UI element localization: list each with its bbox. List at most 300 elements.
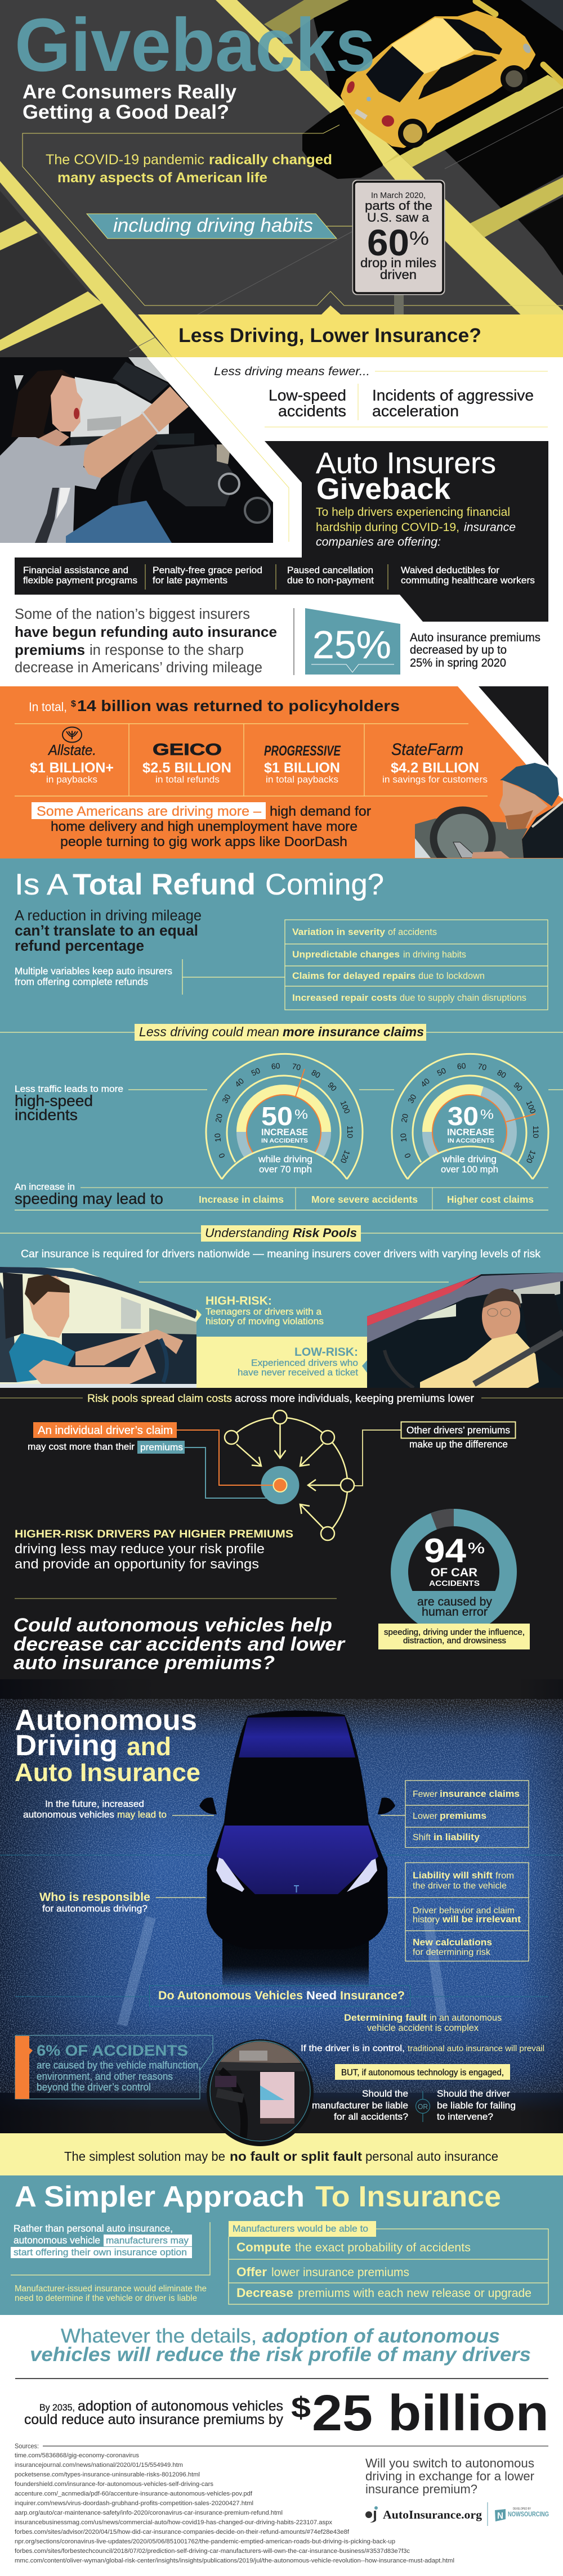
text: manufacturer or driver liable: manufacturer be liable bbox=[312, 2100, 408, 2111]
sources list: Sources: bbox=[15, 2443, 39, 2450]
offerings list: Paused cancellation bbox=[287, 565, 373, 576]
stat: 25 billion: adoption of autonomous vehicles bbox=[78, 2398, 283, 2414]
text: manufacturers may offer insurance: start offering their own insurance option bbox=[14, 2247, 187, 2258]
chart: 94 percent donut: ACCIDENTS bbox=[429, 1579, 480, 1588]
road sign: 60% drop: parts of the bbox=[365, 199, 432, 213]
list: liability changes: will be irrelevant bbox=[442, 1914, 521, 1925]
heading: autonomous driving and auto insurance: Auto Insurance bbox=[15, 1758, 200, 1787]
list: manufacturers would be able to: Decrease bbox=[236, 2286, 293, 2300]
callout: 6 percent of accidents: are caused by the vehicle malfunction, bbox=[37, 2060, 201, 2071]
text: high-risk drivers: Teenagers or drivers with a bbox=[205, 1307, 322, 1317]
gauge: 30 percent over 100 mph: 30 bbox=[448, 1102, 479, 1131]
road sign: 60% drop bbox=[352, 180, 445, 315]
heading: whatever the details: Whatever the details, bbox=[61, 2325, 257, 2347]
gauge: 30 percent over 100 mph: IN ACCIDENTS bbox=[448, 1138, 494, 1144]
text: risk pools spread claim costs bbox=[0, 1392, 563, 1405]
text: determining fault: vehicle accident is complex bbox=[367, 2023, 479, 2033]
panel: blue autonomous driving section bbox=[0, 1679, 563, 2135]
gauge: 30 percent over 100 mph: while driving bbox=[442, 1154, 497, 1165]
stat: 25 billion: By 2035, bbox=[39, 2402, 75, 2413]
offerings list: Waived deductibles for bbox=[401, 565, 499, 576]
banner: simplest solution: no fault or split fault bbox=[230, 2149, 362, 2164]
sources list: npr.org/sections/coronavirus-live-updates/2020/05/06/851001762/the-pandemic-emptied-american-roads-but-driving-is-picking-back-up bbox=[15, 2538, 395, 2545]
heading: could autonomous vehicles help: decrease car accidents and lower bbox=[14, 1634, 346, 1655]
heading: more insurance claims: more insurance claims bbox=[283, 1024, 424, 1039]
photo: delivery driver bbox=[415, 763, 563, 866]
heading: 14 billion: $ bbox=[71, 699, 76, 709]
text: risk pools spread claim costs: across more individuals, keeping premiums lower bbox=[235, 1392, 474, 1405]
list: autonomous outcomes: insurance claims bbox=[440, 1788, 520, 1799]
list: liability changes: Driver behavior and claim bbox=[413, 1906, 515, 1916]
offerings list: for late payments bbox=[153, 575, 227, 586]
text: who is responsible: Who is responsible bbox=[39, 1891, 150, 1904]
stat: 25 billion: 25 billion bbox=[312, 2385, 549, 2442]
insurer: GEICO bbox=[142, 741, 231, 785]
question: will you switch bbox=[365, 2456, 534, 2496]
gauge: 30 percent over 100 mph: 0 bbox=[403, 1152, 413, 1159]
callout: 25 percent: 25% in spring 2020 bbox=[410, 657, 506, 669]
panel: low-risk drivers: have never received a ticket bbox=[238, 1368, 358, 1378]
gauge: 50 percent over 70 mph: over 70 mph bbox=[259, 1164, 312, 1175]
text: less driving means fewer: Incidents of aggressive bbox=[372, 386, 534, 404]
heading: do autonomous vehicles need insurance: Do Autonomous Vehicles bbox=[158, 1989, 303, 2002]
text: high-speed incidents: incidents bbox=[15, 1106, 78, 1123]
panel: auto insurers giveback: Auto Insurers bbox=[316, 447, 496, 480]
text: high-risk drivers bbox=[196, 1294, 324, 1327]
text: speeding may lead to: Increase in claims bbox=[199, 1194, 284, 1205]
list: autonomous outcomes: in liability bbox=[434, 1832, 480, 1842]
callout: some Americans driving more: high demand for bbox=[270, 804, 371, 819]
gauge: 30 percent over 100 mph: 100 bbox=[525, 1099, 538, 1115]
gauge: 50 percent over 70 mph: 120 bbox=[339, 1149, 352, 1165]
subtitle: Are Consumers Really bbox=[23, 81, 237, 103]
callout: some Americans driving more: Some Americans are driving more – bbox=[37, 804, 261, 819]
heading: do autonomous vehicles need insurance: Need bbox=[306, 1989, 337, 2002]
road sign: 60% drop: % bbox=[409, 228, 429, 249]
text: manufacturers may offer insurance: need to determine if the vehicle or driver is liable bbox=[15, 2294, 197, 2303]
question: will you switch: Will you switch to autonomous bbox=[365, 2456, 534, 2470]
frame lines bbox=[23, 125, 563, 314]
sources list: aarp.org/auto/car-maintenance-safety/info-2020/coronavirus-car-insurance-premium-refund.html bbox=[15, 2510, 283, 2516]
gauge: 50 percent over 70 mph: 50 bbox=[250, 1066, 262, 1078]
gauge: 30 percent over 100 mph: 70 bbox=[477, 1062, 488, 1072]
insurer: State Farm: in savings for customers bbox=[382, 774, 488, 785]
offerings list bbox=[23, 564, 535, 590]
logo: NowSourcing bbox=[488, 2502, 549, 2526]
gauge: 50 percent over 70 mph: IN ACCIDENTS bbox=[261, 1138, 308, 1144]
sources list: accenture.com/_acnmedia/pdf-60/accenture-insurance-autonomous-vehicles-pov.pdf bbox=[15, 2490, 253, 2497]
gauge: 30 percent over 100 mph: 80 bbox=[496, 1068, 508, 1080]
sources list: forbes.com/sites/forbestechcouncil/2018/07/02/prediction-self-driving-car-manufacturers-will-own-the-car-insurance-business/#3537d83e7f3c bbox=[15, 2548, 410, 2555]
list: manufacturers would be able to: Compute bbox=[236, 2240, 291, 2254]
text: higher-risk drivers pay higher premiums: driving less may reduce your risk profile bbox=[15, 1541, 265, 1557]
gauge: 50 percent over 70 mph: 50 bbox=[261, 1102, 293, 1131]
text: determining fault: Determining fault bbox=[344, 2013, 427, 2023]
banner: simplest solution bbox=[0, 2133, 563, 2175]
list: refund variables: Variation in severity bbox=[292, 927, 386, 937]
callout: some Americans driving more: people turning to gig work apps like DoorDash bbox=[60, 834, 347, 849]
sources list: forbes.com/sites/advisor/2020/04/15/how-did-car-insurance-companies-decide-on-their-refund-amounts/#74ef28e43e8f bbox=[15, 2529, 350, 2535]
text: manufacturer or driver liable bbox=[312, 2088, 516, 2122]
heading: understanding risk pools: Understanding bbox=[205, 1226, 289, 1240]
heading: is a total refund coming: Coming? bbox=[265, 868, 384, 901]
list: autonomous outcomes bbox=[405, 1781, 529, 1847]
road sign: 60% drop: 60 bbox=[367, 222, 409, 263]
gauge: 30 percent over 100 mph: INCREASE bbox=[447, 1127, 494, 1138]
chart: 94 percent donut: % bbox=[468, 1540, 485, 1557]
text: may lead to: In the future, increased bbox=[45, 1799, 144, 1809]
text: refund percentage: can’t translate to an equal bbox=[15, 922, 198, 939]
gauge: 30 percent over 100 mph: 110 bbox=[531, 1126, 540, 1138]
text: manufacturers may offer insurance: Manufacturer-issued insurance would eliminate the bbox=[15, 2284, 207, 2294]
callout: some Americans driving more: home delivery and high unemployment have more bbox=[51, 819, 358, 834]
photo: young driver bbox=[0, 1266, 197, 1390]
gauge: 30 percent over 100 mph: 30 bbox=[406, 1093, 418, 1105]
heading: more insurance claims: Less driving could mean bbox=[139, 1024, 279, 1039]
insurer: State Farm bbox=[382, 740, 488, 785]
text: high-risk drivers: HIGH-RISK: bbox=[205, 1294, 272, 1307]
callout: 6 percent of accidents: environment, and other reasons bbox=[37, 2071, 173, 2082]
heading: understanding risk pools: Risk Pools bbox=[293, 1226, 357, 1240]
label: other drivers' premiums: Other drivers’ premiums bbox=[406, 1424, 510, 1436]
gauge: 30 percent over 100 mph: 120 bbox=[525, 1149, 538, 1165]
text: high-speed incidents bbox=[15, 1084, 123, 1123]
text: if driver in control bbox=[301, 2044, 544, 2080]
diagram: risk pool bbox=[177, 1410, 401, 1540]
text: high-speed incidents: Less traffic leads to more bbox=[15, 1084, 123, 1094]
gauge: 50 percent over 70 mph: 90 bbox=[326, 1080, 339, 1093]
chart: 94 percent donut: OF CAR bbox=[431, 1566, 477, 1579]
heading: do autonomous vehicles need insurance: Insurance? bbox=[340, 1989, 405, 2002]
heading: whatever the details: adoption of autonomous bbox=[262, 2325, 500, 2347]
gauge: 50 percent over 70 mph: 100 bbox=[339, 1099, 352, 1115]
gauge: 30 percent over 100 mph: 50 bbox=[436, 1066, 448, 1078]
logo: AutoInsurance.org: AutoInsurance.org bbox=[383, 2508, 482, 2521]
road sign: 60% drop: U.S. saw a bbox=[367, 210, 430, 224]
list: refund variables: Unpredictable changes bbox=[292, 950, 400, 960]
list: liability changes: for determining risk bbox=[413, 1948, 491, 1957]
panel: low-risk drivers bbox=[196, 1337, 367, 1388]
gauge: 50 percent over 70 mph: 30 bbox=[220, 1093, 233, 1105]
photo: older driver bbox=[367, 1271, 563, 1390]
text: insurers refunding premiums: Some of the nation’s biggest insurers bbox=[15, 606, 250, 622]
panel: auto insurers giveback: insurance bbox=[464, 521, 516, 534]
text: determining fault: in an autonomous bbox=[430, 2013, 502, 2023]
heading: autonomous driving and auto insurance: Autonomous bbox=[15, 1704, 197, 1737]
photo: angry woman driving bbox=[0, 357, 276, 546]
gauge: 30 percent over 100 mph: 10 bbox=[399, 1133, 408, 1143]
text: less driving means fewer: accidents bbox=[278, 402, 346, 420]
panel: auto insurers giveback: hardship during COVID-19, bbox=[316, 521, 459, 534]
subtitle: Getting a Good Deal? bbox=[23, 101, 229, 123]
text: refund percentage: Multiple variables keep auto insurers bbox=[15, 965, 172, 977]
text: insurers refunding premiums: have begun refunding auto insurance bbox=[15, 623, 277, 640]
text: manufacturer or driver liable: to intervene? bbox=[437, 2111, 493, 2122]
gauge: 50 percent over 70 mph: 0 bbox=[217, 1152, 227, 1159]
text: high-risk drivers: history of moving violations bbox=[205, 1316, 324, 1327]
stat: 25 billion bbox=[24, 2385, 549, 2442]
panel: auto insurers giveback: Giveback bbox=[316, 473, 451, 506]
gauge: 30 percent over 100 mph: 60 bbox=[457, 1061, 467, 1071]
gauge: 50 percent over 70 mph: 80 bbox=[310, 1068, 322, 1080]
text: manufacturer or driver liable: for all accidents? bbox=[334, 2111, 408, 2122]
text: refund percentage bbox=[15, 908, 202, 987]
heading: autonomous driving and auto insurance: Driving bbox=[15, 1729, 118, 1762]
list: manufacturers would be able to bbox=[229, 2221, 548, 2304]
insurer: GEICO: in total refunds bbox=[155, 774, 220, 785]
subtitle bbox=[23, 81, 237, 123]
text: manufacturer or driver liable: Should the driver bbox=[437, 2088, 510, 2099]
heading: is a total refund coming: Is A bbox=[15, 868, 68, 901]
photo: car dashboard in circle bbox=[207, 2039, 314, 2146]
offerings list: Financial assistance and bbox=[23, 565, 128, 576]
list: liability changes bbox=[405, 1863, 529, 1961]
list: refund variables: in driving habits bbox=[403, 950, 466, 960]
sources list: insurancejournal.com/news/national/2020/01/15/554949.htm bbox=[15, 2462, 183, 2469]
text: risk pools spread claim costs: Risk pools spread claim costs bbox=[87, 1392, 232, 1405]
callout: 25 percent: Auto insurance premiums bbox=[410, 631, 540, 644]
gauge: 30 percent over 100 mph: 20 bbox=[399, 1113, 410, 1123]
panel: auto insurers giveback: companies are offering: bbox=[316, 536, 441, 549]
offerings list: flexible payment programs bbox=[23, 575, 137, 586]
heading: a simpler approach: To Insurance bbox=[315, 2181, 501, 2213]
gauge: 30 percent over 100 mph bbox=[392, 1054, 548, 1179]
gauge: 50 percent over 70 mph: while driving bbox=[258, 1154, 312, 1165]
gauge: 50 percent over 70 mph: INCREASE bbox=[261, 1127, 308, 1138]
list: liability changes: history bbox=[413, 1915, 440, 1925]
text: higher-risk drivers pay higher premiums bbox=[15, 1528, 337, 1599]
chart: 94 percent donut: distraction, and drowsiness bbox=[403, 1636, 506, 1646]
panel: dark risk pool section bbox=[0, 1388, 563, 1692]
text: may lead to bbox=[23, 1799, 405, 1820]
sources list: pocketsense.com/types-insurance-uninsurable-risks-8012096.html bbox=[15, 2471, 200, 2478]
insurer: GEICO: $2.5 BILLION bbox=[142, 760, 231, 776]
sources list: foundershield.com/insurance-for-autonomous-vehicles-self-driving-cars bbox=[15, 2481, 214, 2488]
sources list: mmc.com/content/oliver-wyman/global-risk-center/insights/insights/publications/2019/jul/the-autonomous-vehicle-revolution--how-insurance-must-adapt.html bbox=[15, 2557, 454, 2564]
heading: more insurance claims bbox=[0, 1024, 563, 1041]
list: manufacturers would be able to: lower insurance premiums bbox=[271, 2266, 409, 2279]
offerings list: Penalty-free grace period bbox=[153, 565, 262, 576]
text: less driving means fewer: Less driving means fewer... bbox=[214, 365, 370, 378]
list: liability changes: New calculations bbox=[413, 1937, 492, 1948]
text: manufacturers may offer insurance bbox=[11, 2222, 210, 2303]
intro text bbox=[46, 152, 332, 186]
gauge: 50 percent over 70 mph: 70 bbox=[291, 1062, 302, 1072]
heading: a simpler approach bbox=[15, 2181, 501, 2213]
label: other drivers' premiums: make up the difference bbox=[409, 1438, 508, 1450]
list: autonomous outcomes: Shift bbox=[413, 1833, 431, 1842]
sources list: inquirer.com/news/virus-doordash-grubhand-profits-competition-sales-20200427.html bbox=[15, 2500, 253, 2507]
heading: 14 billion: In total, bbox=[29, 700, 67, 714]
logo: AutoInsurance.org bbox=[365, 2506, 482, 2523]
text: higher-risk drivers pay higher premiums: HIGHER-RISK DRIVERS PAY HIGHER PREMIUMS bbox=[15, 1528, 293, 1540]
list: manufacturers would be able to: the exact probability of accidents bbox=[295, 2241, 471, 2254]
gauge: 30 percent over 100 mph: 40 bbox=[419, 1076, 431, 1089]
chart: 94 percent donut: are caused by bbox=[417, 1595, 492, 1608]
gauge: 30 percent over 100 mph: 90 bbox=[512, 1080, 525, 1093]
road sign: 60% drop: drop in miles bbox=[360, 255, 436, 270]
heading: whatever the details: vehicles will reduce the risk profile of many drivers bbox=[30, 2344, 531, 2366]
list: liability changes: Liability will shift bbox=[413, 1870, 493, 1881]
text: less driving means fewer bbox=[214, 365, 548, 427]
text: if driver in control: If the driver is in control, bbox=[301, 2044, 405, 2053]
panel: simpler approach section bbox=[0, 2175, 563, 2315]
thin line beside photo bbox=[175, 357, 289, 542]
text: manufacturer or driver liable: Should the bbox=[362, 2088, 408, 2099]
text: speeding may lead to: Higher cost claims bbox=[447, 1194, 534, 1205]
banner: including driving habits bbox=[87, 214, 352, 239]
list: refund variables: due to lockdown bbox=[418, 971, 485, 981]
text: if driver in control: BUT, if autonomous technology is engaged, bbox=[341, 2068, 504, 2078]
list: autonomous outcomes: Lower bbox=[413, 1811, 438, 1821]
insurer: Progressive: in total paybacks bbox=[266, 774, 338, 785]
road sign: 60% drop: driven bbox=[380, 267, 417, 282]
image: electric car from above bbox=[199, 1710, 395, 1989]
heading: autonomous driving and auto insurance bbox=[15, 1704, 200, 1787]
chart: 94 percent donut: speeding, driving under the influence, bbox=[384, 1628, 525, 1637]
asphalt background bbox=[0, 1679, 563, 2135]
list: refund variables: due to supply chain disruptions bbox=[400, 993, 526, 1003]
title: Givebacks bbox=[15, 3, 376, 87]
heading: could autonomous vehicles help: Could autonomous vehicles help bbox=[14, 1615, 332, 1636]
chart: 94 percent donut: 94 bbox=[424, 1532, 467, 1570]
hero section bbox=[0, 0, 563, 357]
gauge: 50 percent over 70 mph: 110 bbox=[346, 1126, 355, 1138]
text: refund percentage: refund percentage bbox=[15, 937, 144, 954]
insurer: Allstate: Allstate. bbox=[47, 741, 96, 758]
stat: 25 billion: $ bbox=[291, 2391, 311, 2424]
banner: less driving, lower insurance: Less Driving, Lower Insurance? bbox=[178, 325, 481, 347]
gauge: 50 percent over 70 mph: 60 bbox=[271, 1061, 281, 1071]
callout: 25 percent bbox=[305, 608, 540, 675]
list: manufacturers would be able to: Offer bbox=[236, 2265, 267, 2279]
list: refund variables: Claims for delayed repairs bbox=[292, 971, 415, 981]
chart: 94 percent donut: human error bbox=[422, 1606, 488, 1619]
gauge: 50 percent over 70 mph: % bbox=[294, 1107, 308, 1122]
gauge: 30 percent over 100 mph: % bbox=[480, 1107, 494, 1122]
gauge: 50 percent over 70 mph bbox=[206, 1054, 363, 1179]
heading: understanding risk pools bbox=[0, 1225, 563, 1242]
gauge: 50 percent over 70 mph: 40 bbox=[233, 1076, 245, 1089]
list: manufacturers would be able to: premiums with each new release or upgrade bbox=[298, 2287, 531, 2300]
panel: low-risk drivers: Experienced drivers who bbox=[251, 1358, 358, 1368]
text: insurers refunding premiums: decrease in Americans’ driving mileage bbox=[15, 660, 262, 676]
banner: simplest solution: personal auto insurance bbox=[365, 2149, 498, 2164]
text: manufacturers may offer insurance: manufacturers may bbox=[106, 2235, 189, 2246]
text: speeding may lead to: An increase in bbox=[15, 1181, 75, 1192]
insurer: Allstate: in paybacks bbox=[46, 774, 97, 785]
sources list: time.com/5836868/gig-economy-coronavirus bbox=[15, 2452, 139, 2459]
text: who is responsible bbox=[39, 1891, 405, 1914]
callout: 25 percent: decreased by up to bbox=[410, 644, 507, 657]
text: may lead to: may lead to bbox=[117, 1809, 167, 1820]
label: individual driver's claim: premiums bbox=[140, 1442, 183, 1453]
text: less driving means fewer: acceleration bbox=[372, 402, 459, 420]
heading: 14 billion: 14 billion was returned to policyholders bbox=[77, 697, 400, 714]
callout: 25 percent: 25% bbox=[312, 623, 391, 667]
text: manufacturers may offer insurance: Rather than personal auto insurance, bbox=[14, 2223, 173, 2234]
list: liability changes: the driver to the vehicle bbox=[413, 1881, 507, 1891]
banner: simplest solution: The simplest solution may be bbox=[64, 2149, 225, 2164]
list: autonomous outcomes: premiums bbox=[440, 1810, 486, 1821]
text: determining fault bbox=[344, 2013, 502, 2033]
text: car insurance is required: Car insurance is required for drivers nationwide — meaning insurers cover drivers with varying levels of risk bbox=[21, 1248, 540, 1260]
text: speeding may lead to: More severe accidents bbox=[311, 1194, 418, 1205]
text: speeding may lead to: speeding may lead to bbox=[15, 1190, 163, 1207]
offerings list: commuting healthcare workers bbox=[401, 575, 535, 586]
heading: autonomous driving and auto insurance: and bbox=[127, 1732, 171, 1761]
label: individual driver's claim: An individual driver’s claim bbox=[38, 1424, 173, 1437]
text: who is responsible: for autonomous driving? bbox=[42, 1903, 148, 1914]
intro text: The COVID-19 pandemic bbox=[46, 152, 204, 168]
list: autonomous outcomes: Fewer bbox=[413, 1790, 438, 1799]
panel: white intro section background bbox=[0, 357, 563, 686]
text: if driver in control: traditional auto insurance will prevail bbox=[408, 2044, 544, 2053]
logo: NowSourcing: DEVELOPED BY bbox=[513, 2507, 531, 2511]
callout: some Americans driving more bbox=[32, 802, 371, 849]
heading: could autonomous vehicles help bbox=[14, 1615, 346, 1674]
stat: 25 billion: could reduce auto insurance premiums by bbox=[24, 2412, 283, 2427]
insurer: Allstate: $1 BILLION+ bbox=[30, 760, 114, 776]
chart: 94 percent donut bbox=[378, 1509, 530, 1649]
logo: NowSourcing: N bbox=[497, 2511, 503, 2521]
sources list bbox=[15, 2443, 548, 2564]
heading: is a total refund coming bbox=[15, 868, 384, 901]
list: liability changes: from bbox=[495, 1871, 514, 1881]
list: refund variables: Increased repair costs bbox=[292, 993, 397, 1003]
heading: whatever the details bbox=[15, 2325, 548, 2379]
insurer: State Farm: $4.2 BILLION bbox=[391, 760, 479, 776]
question: will you switch: insurance premium? bbox=[365, 2482, 477, 2496]
gauge: 30 percent over 100 mph: over 100 mph bbox=[441, 1164, 498, 1175]
panel: auto insurers giveback bbox=[15, 441, 548, 622]
list: refund variables bbox=[285, 920, 548, 1010]
callout: 6 percent of accidents: beyond the driver’s control bbox=[37, 2082, 151, 2093]
callout: 6 percent of accidents: 6% OF ACCIDENTS bbox=[37, 2042, 188, 2059]
insurer: Progressive: $1 BILLION bbox=[264, 760, 340, 776]
panel: orange refunds section bbox=[0, 686, 563, 866]
panel: low-risk drivers: LOW-RISK: bbox=[294, 1345, 358, 1359]
heading: is a total refund coming: Total Refund bbox=[73, 868, 256, 901]
insurer: Progressive: PROGRESSIVE bbox=[264, 743, 341, 759]
sources list: insurancebusinessmag.com/us/news/commercial-auto/how-covid19-has-changed-our-driving-habits-223107.aspx bbox=[15, 2519, 333, 2526]
text: manufacturer or driver liable: be liable for failing bbox=[437, 2100, 516, 2111]
label: individual driver's claim bbox=[28, 1422, 185, 1454]
text: refund percentage: from offering complete refunds bbox=[15, 976, 148, 987]
text: insurers refunding premiums: premiums bbox=[15, 641, 85, 658]
heading: could autonomous vehicles help: auto insurance premiums? bbox=[14, 1652, 275, 1674]
gauge: 50 percent over 70 mph: 10 bbox=[213, 1133, 222, 1143]
list: manufacturers would be able to: Manufacturers would be able to bbox=[233, 2223, 368, 2234]
text: refund percentage: A reduction in driving mileage bbox=[15, 908, 202, 924]
hero background: parking lot bbox=[0, 0, 563, 357]
text: manufacturers may offer insurance: autonomous vehicle bbox=[14, 2235, 100, 2246]
panel: auto insurers giveback: To help drivers experiencing financial bbox=[316, 506, 510, 519]
text: higher-risk drivers pay higher premiums: and provide an opportunity for savings bbox=[15, 1557, 259, 1572]
panel: teal total refund section bbox=[0, 858, 563, 1390]
insurer: Allstate bbox=[30, 727, 114, 785]
offerings list: due to non-payment bbox=[287, 575, 374, 586]
insurer: GEICO: GEICO bbox=[153, 741, 222, 759]
text: manufacturer or driver liable: OR bbox=[418, 2102, 428, 2111]
question: will you switch: driving in exchange for a lower bbox=[365, 2469, 534, 2483]
text: may lead to: autonomous vehicles bbox=[23, 1809, 114, 1820]
text: less driving means fewer: Low-speed bbox=[269, 386, 346, 404]
heading: a simpler approach: A Simpler Approach bbox=[15, 2181, 305, 2213]
insurer: Progressive bbox=[264, 743, 341, 785]
gauge: 50 percent over 70 mph: 20 bbox=[213, 1113, 224, 1123]
text: insurers refunding premiums bbox=[15, 606, 294, 676]
